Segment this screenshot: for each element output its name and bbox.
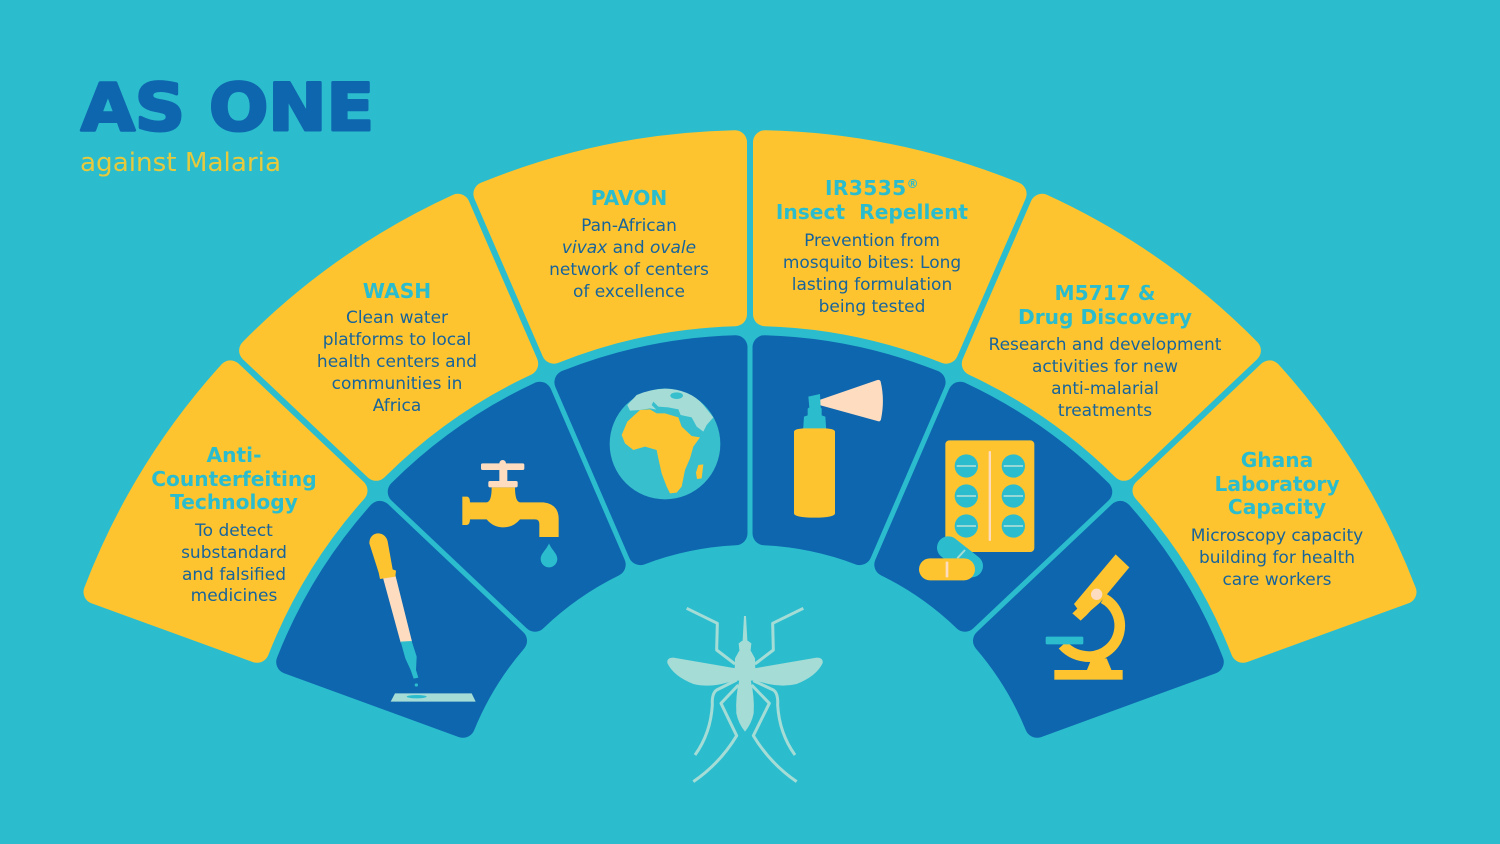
panel: PAVON (485, 142, 735, 352)
body text: treatments (1058, 401, 1152, 421)
body text: network of centers (549, 260, 709, 280)
heading: Technology (170, 490, 298, 514)
body text: Prevention from (804, 231, 940, 251)
heading: M5717 & (1055, 281, 1155, 305)
tile shape (886, 394, 1100, 620)
panel shape (974, 206, 1249, 469)
panel shape (485, 142, 735, 352)
panel: M5717 and Drug Discovery (974, 206, 1249, 469)
body text: health centers and (317, 352, 477, 372)
heading: Ghana (1241, 448, 1313, 472)
legs (687, 608, 803, 782)
heading: Insect Repellent (776, 200, 968, 224)
body text: and falsified (182, 565, 286, 585)
body text: being tested (819, 297, 925, 317)
panel: faucet icon tile (400, 394, 614, 620)
panel: spray icon tile (764, 347, 934, 553)
icon: microscope (1046, 554, 1129, 680)
panel: Ghana Laboratory Capacity (1144, 372, 1404, 651)
panel: pills icon tile (886, 394, 1100, 620)
panel shape (765, 142, 1015, 352)
heading: Counterfeiting (151, 467, 317, 491)
icon: spray bottle (794, 380, 883, 518)
heading: Capacity (1228, 495, 1326, 519)
body text: mosquito bites: Long (783, 253, 961, 273)
body text: vivax and ovale (562, 238, 696, 258)
body text: lasting formulation (792, 275, 952, 295)
icon: pipette and slide (369, 533, 476, 702)
heading: IR3535 (825, 176, 919, 200)
body text: building for health (1199, 548, 1355, 568)
title: AS ONE: AS ONE (81, 71, 374, 146)
panel: pipette icon tile (288, 513, 515, 726)
title block (80, 71, 374, 178)
icon: mosquito (667, 608, 823, 782)
body text: platforms to local (323, 330, 471, 350)
panel: Anti-Counterfeiting Technology (96, 372, 356, 651)
body text: anti-malarial (1051, 379, 1159, 399)
body text: To detect (194, 521, 273, 541)
body text: medicines (191, 586, 277, 606)
tile shape (288, 513, 515, 726)
body text: substandard (181, 543, 287, 563)
body text: Pan-African (581, 216, 677, 236)
body text: care workers (1222, 570, 1332, 590)
tile shape (985, 513, 1212, 726)
body text: Research and development (989, 335, 1222, 355)
body text: of excellence (573, 282, 685, 302)
body text: Clean water (346, 308, 448, 328)
tile shape (566, 347, 736, 553)
heading: Anti- (207, 443, 261, 467)
panel shape (96, 372, 356, 651)
subtitle: against Malaria (80, 148, 281, 178)
body text: Microscopy capacity (1191, 526, 1363, 546)
heading: Laboratory (1214, 472, 1340, 496)
icon: globe with Africa (610, 389, 720, 499)
heading: ® (907, 177, 919, 191)
panel shape (251, 206, 526, 469)
body text: activities for new (1032, 357, 1178, 377)
panel shape (1144, 372, 1404, 651)
icon: blister pack and capsules (919, 440, 1034, 580)
heading: WASH (363, 279, 431, 303)
body text: communities in (332, 374, 462, 394)
body text: Africa (373, 396, 421, 416)
heading: Drug Discovery (1018, 305, 1192, 329)
heading: PAVON (591, 186, 667, 210)
panel: microscope icon tile (985, 513, 1212, 726)
tile shape (764, 347, 934, 553)
panel: globe icon tile (566, 347, 736, 553)
icon: water tap with drop (462, 460, 559, 567)
tile shape (400, 394, 614, 620)
panel: WASH (251, 206, 526, 469)
panel: IR3535 Insect Repellent (765, 142, 1015, 352)
